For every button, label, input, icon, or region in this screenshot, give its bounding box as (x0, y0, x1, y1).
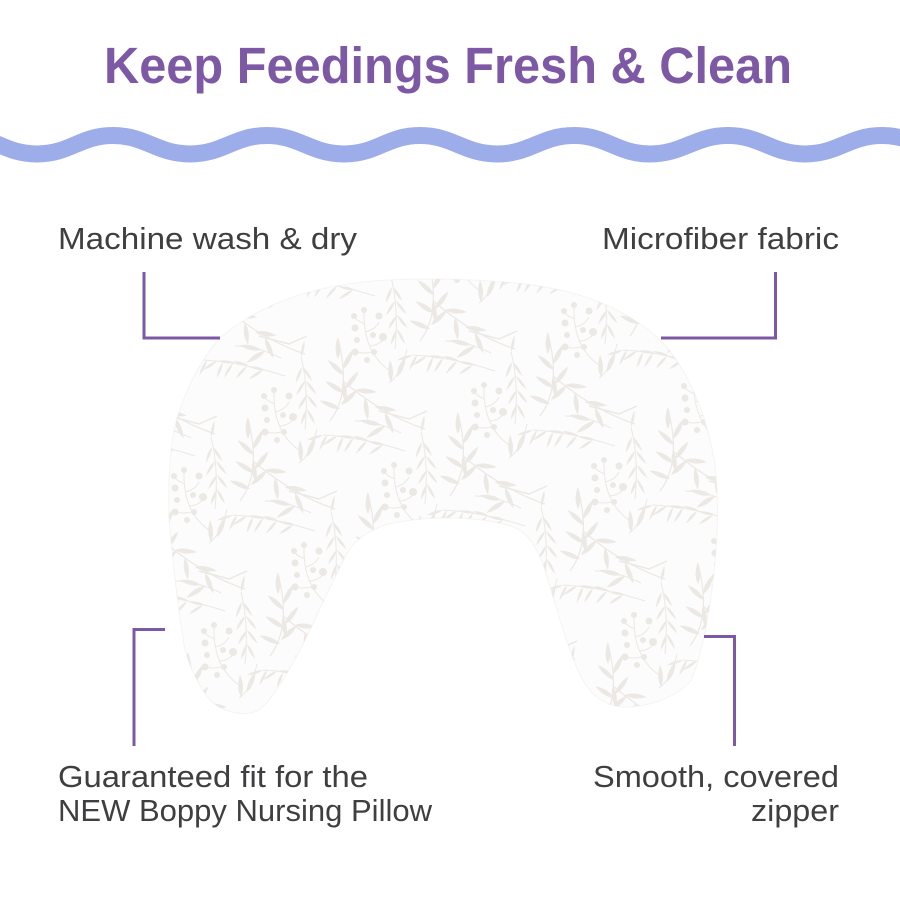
label: guaranteed fit: Guaranteed fit for the (58, 759, 368, 794)
pillow cover with leaf print (168, 278, 718, 714)
label: covered zipper: zipper (751, 793, 839, 828)
label: guaranteed fit: NEW Boppy Nursing Pillow (58, 793, 433, 828)
leader line: microfiber (661, 272, 776, 338)
wave divider (0, 136, 900, 154)
title: Keep Feedings Fresh & Clean (104, 37, 792, 94)
label: microfiber: Microfiber fabric (602, 221, 839, 256)
label: covered zipper: Smooth, covered (593, 759, 839, 794)
label: covered zipper (593, 759, 839, 828)
label: guaranteed fit (58, 759, 433, 828)
leader line: covered zipper (704, 636, 734, 746)
leader line: guaranteed fit (134, 630, 165, 746)
label: machine wash: Machine wash & dry (58, 221, 358, 256)
leader line: machine wash (144, 272, 220, 338)
